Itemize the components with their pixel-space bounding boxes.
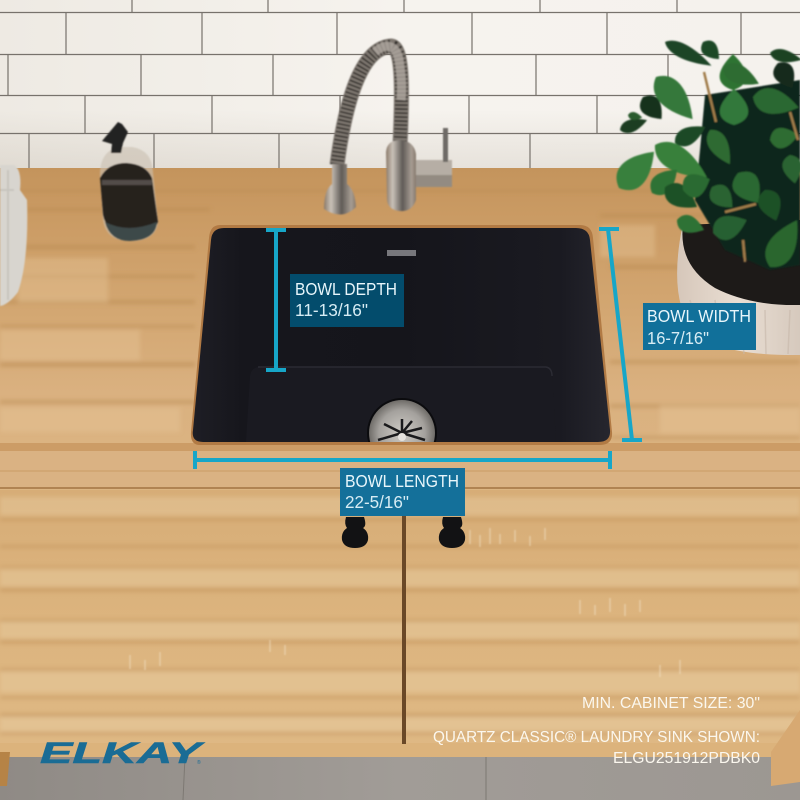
sink basin (191, 225, 612, 468)
planter (609, 36, 800, 355)
label: bowl length: BOWL LENGTH (345, 471, 459, 491)
bowl floor (246, 367, 556, 442)
towel (0, 165, 27, 306)
soil (682, 220, 800, 305)
drain (367, 398, 437, 442)
label: bowl width (643, 303, 756, 350)
foliage (609, 36, 800, 274)
label: bowl depth: 11-13/16" (295, 300, 368, 320)
dimension line: bowl length (195, 451, 610, 469)
handle (408, 160, 452, 187)
faucet (324, 46, 452, 215)
wooden countertop (0, 168, 800, 490)
label: bowl depth: BOWL DEPTH (295, 279, 397, 299)
note: product shown: ELGU251912PDBK0 (613, 750, 760, 767)
note: product shown: QUARTZ CLASSIC® LAUNDRY SINK SHOWN: (433, 729, 760, 746)
logo: Elkay (40, 737, 206, 770)
note: minimum cabinet size: MIN. CABINET SIZE: 30" (582, 695, 760, 712)
dimension line: bowl width (599, 229, 642, 440)
floor (0, 757, 800, 800)
spring hose (337, 46, 402, 165)
cabinet doors (0, 490, 800, 757)
soap bottle (100, 122, 158, 241)
overflow plate (387, 250, 416, 256)
label: bowl width: BOWL WIDTH (647, 306, 751, 326)
logo: Elkay: ® (197, 759, 201, 766)
bowl (193, 228, 610, 442)
logo: Elkay: ELKAY (40, 737, 206, 770)
label: bowl width: 16-7/16" (647, 328, 709, 348)
pot (677, 228, 800, 355)
faucet body (386, 140, 416, 211)
wood cut-out rim (191, 225, 612, 445)
label: bowl depth (290, 274, 404, 327)
dimension line: bowl depth (266, 230, 286, 370)
note: product shown (433, 729, 760, 767)
cabinet knobs (342, 517, 465, 548)
label: bowl length (340, 468, 465, 516)
label: bowl length: 22-5/16" (345, 492, 409, 512)
pale wood flecks (130, 528, 680, 677)
countertop front edge (0, 443, 800, 489)
cabinet legs (0, 710, 800, 786)
tiled wall background (0, 0, 800, 170)
door gap (402, 514, 406, 744)
spray head (324, 164, 356, 215)
